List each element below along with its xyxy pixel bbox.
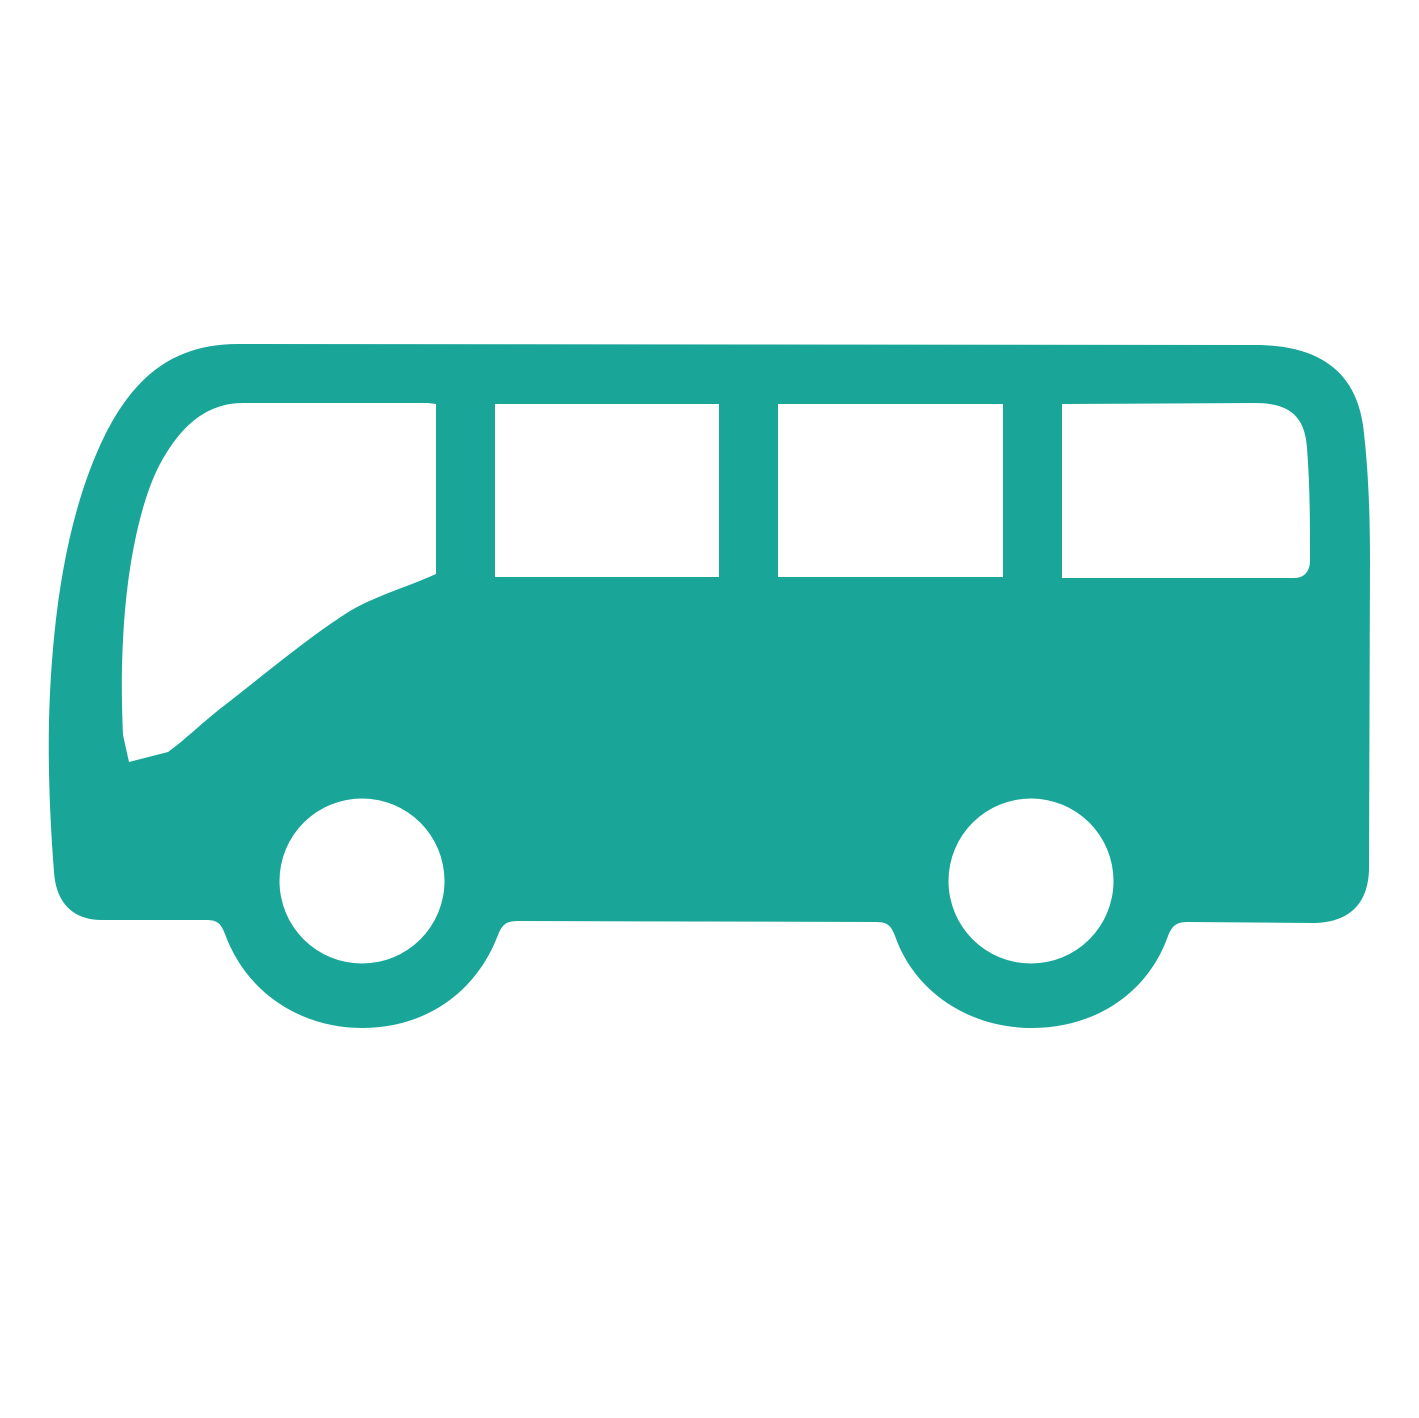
icon: bus xyxy=(49,344,1370,1028)
front wheel hub xyxy=(280,798,444,964)
rear wheel hub xyxy=(948,798,1114,964)
bus body xyxy=(49,344,1370,1028)
